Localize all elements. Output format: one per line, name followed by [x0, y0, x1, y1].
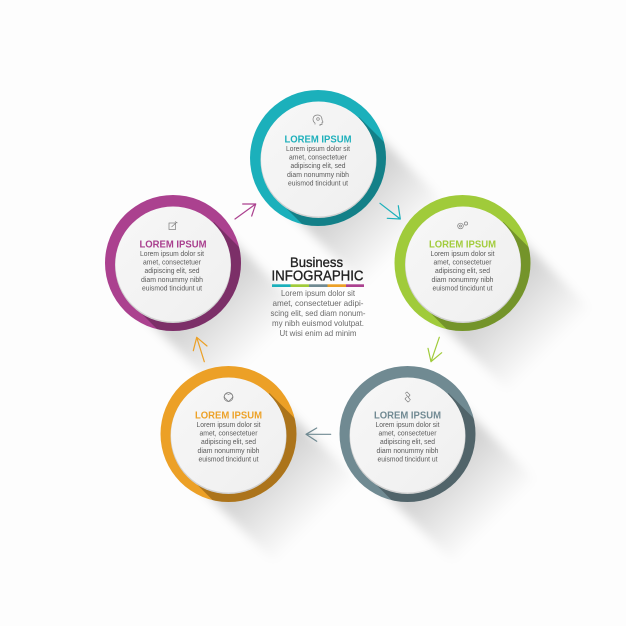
text block: euismod tincidunt ut [378, 456, 438, 463]
text block: amet, consectetuer [378, 431, 437, 438]
text block [430, 251, 495, 292]
text block: diam nonummy nibh [287, 172, 349, 179]
long shadow: teal circle [277, 117, 459, 299]
title: INFOGRAPHIC [272, 269, 364, 285]
panel: green step [394, 195, 530, 331]
text block: amet, consectetuer [143, 260, 202, 267]
rainbow divider [272, 284, 364, 287]
text block [376, 422, 440, 463]
long shadow: green circle [422, 222, 604, 404]
center text block: Ut wisi enim ad minim [280, 329, 357, 338]
icon: gears [458, 222, 468, 229]
icon: heart [224, 392, 233, 402]
icon: pencil note [169, 222, 178, 230]
heading: LOREM IPSUM [374, 410, 441, 422]
text block: adipiscing elit, sed [201, 439, 256, 446]
text block: Lorem ipsum dolor sit [196, 422, 261, 429]
heading: LOREM IPSUM [140, 238, 207, 250]
arrow: teal to green [380, 203, 400, 219]
text block: diam nonummy nibh [376, 448, 439, 455]
long shadow: gray circle [366, 393, 548, 575]
text block: Lorem ipsum dolor sit [376, 422, 440, 429]
text block [140, 251, 204, 292]
center text block [270, 289, 366, 338]
text block: Lorem ipsum dolor sit [140, 251, 204, 258]
center text block: Lorem ipsum dolor sit [281, 289, 356, 298]
text block [286, 146, 350, 187]
text block: amet, consectetuer [289, 155, 348, 162]
center text block: scing elit, sed diam nonum- [270, 309, 366, 318]
text block: adipiscing elit, sed [380, 439, 435, 446]
text block: adipiscing elit, sed [290, 163, 346, 170]
text block: euismod tincidunt ut [142, 285, 202, 292]
text block: Lorem ipsum dolor sit [430, 251, 495, 258]
arrow: gray to orange [306, 428, 331, 441]
panel: purple step [105, 195, 241, 331]
text block: diam nonummy nibh [141, 277, 203, 284]
arrow: purple to teal [235, 204, 256, 219]
arrow: orange to purple [193, 337, 207, 362]
heading: LOREM IPSUM [195, 410, 262, 422]
text block: adipiscing elit, sed [435, 268, 490, 275]
text block: euismod tincidunt ut [432, 285, 493, 292]
icon: head [313, 115, 323, 126]
icon: link [405, 392, 410, 402]
long shadow: orange circle [188, 393, 370, 575]
heading: LOREM IPSUM [284, 134, 352, 146]
text block: amet, consectetuer [434, 260, 492, 267]
text block: Lorem ipsum dolor sit [286, 146, 350, 153]
text block: adipiscing elit, sed [144, 268, 200, 275]
text block: amet, consectetuer [200, 431, 258, 438]
panel: gray step [340, 366, 476, 502]
long shadow: purple circle [132, 222, 314, 404]
text block: euismod tincidunt ut [288, 180, 348, 187]
title: Business [290, 254, 343, 270]
text block: diam nonummy nibh [432, 277, 494, 284]
arrow: green to gray [428, 337, 442, 362]
text block: euismod tincidunt ut [198, 456, 259, 463]
infographic canvas [105, 90, 576, 547]
text block [196, 422, 261, 463]
title [272, 254, 364, 285]
heading: LOREM IPSUM [429, 238, 496, 250]
text block: diam nonummy nibh [198, 448, 260, 455]
center text block: my nibh euismod volutpat. [272, 319, 364, 328]
center text block: amet, consectetuer adipi- [272, 299, 364, 308]
panel: orange step [160, 366, 296, 502]
panel: teal step [250, 90, 386, 226]
